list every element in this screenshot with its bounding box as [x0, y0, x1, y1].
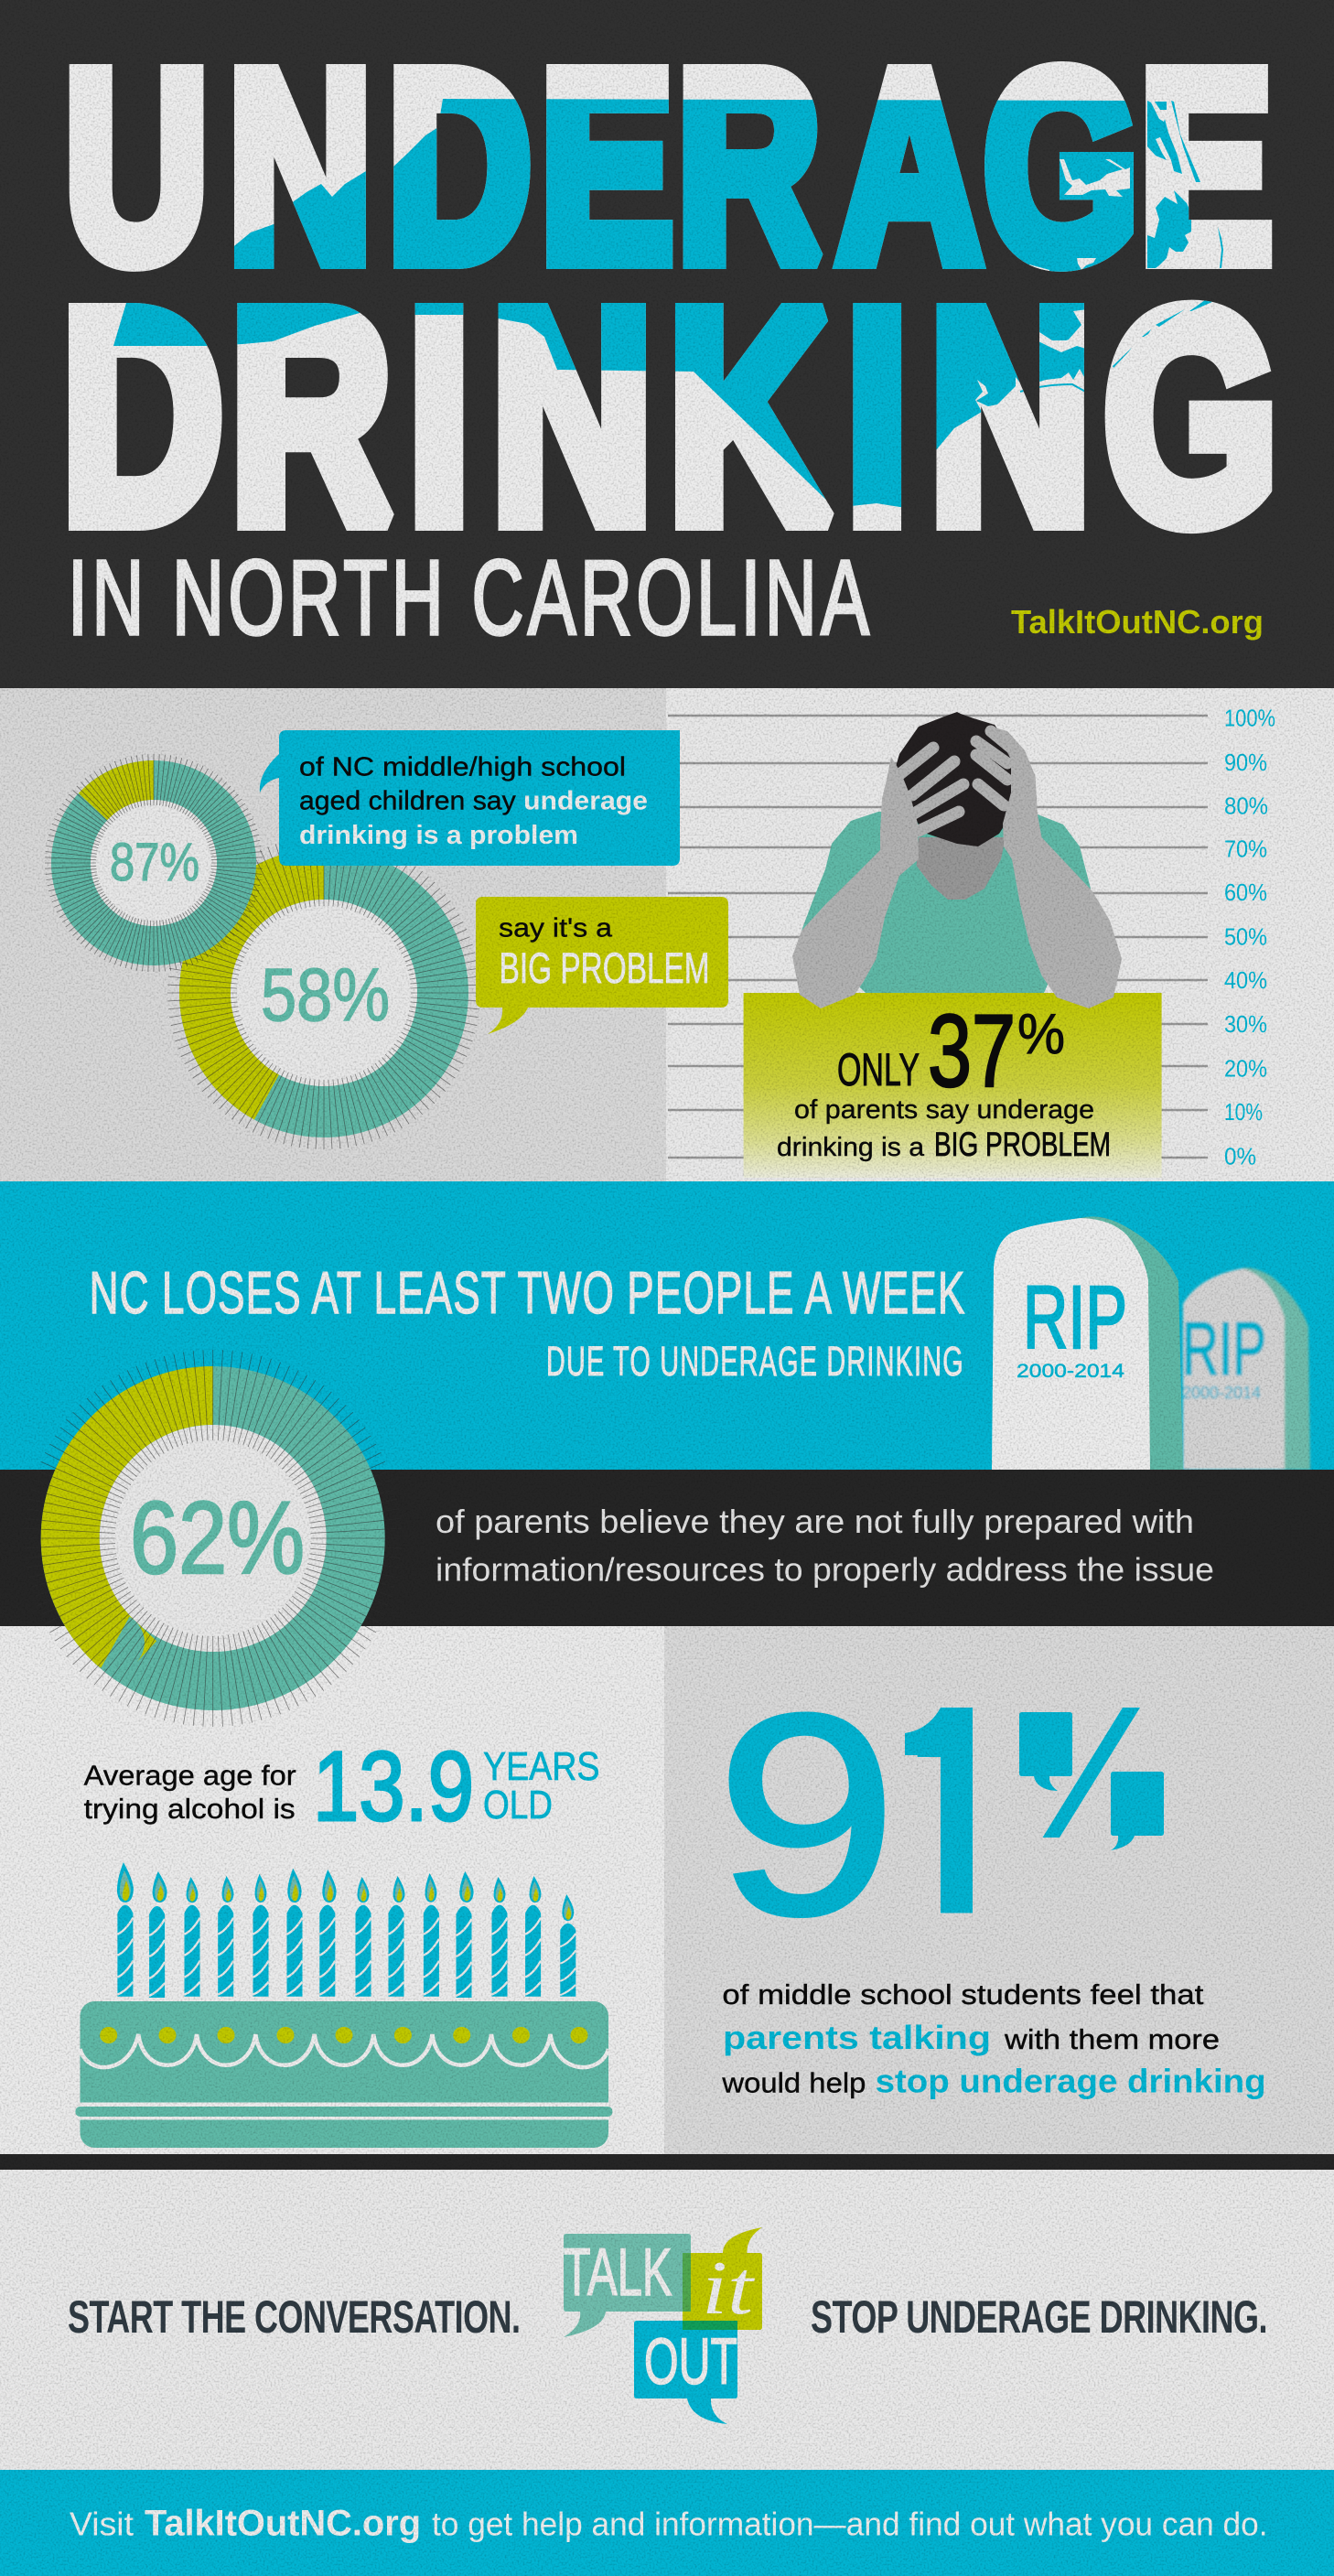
callout: children say problem: drinking is a problem	[299, 821, 578, 850]
percent scale labels: 0%	[1224, 1143, 1256, 1170]
average age text: 13.9	[313, 1730, 474, 1841]
footer text	[70, 2504, 1268, 2544]
percent scale labels: 80%	[1224, 792, 1268, 820]
big number: 91: 9	[715, 1654, 898, 1975]
middle school stat text	[721, 1978, 1266, 2100]
percent scale rule lines	[668, 716, 1208, 1158]
callout: children say problem: aged children say underage	[299, 787, 648, 816]
average age text: trying alcohol is	[84, 1793, 296, 1825]
preparedness text: information/resources to properly address the issue	[436, 1550, 1214, 1589]
logo: Talk It Out speech bubbles: OUT	[644, 2326, 737, 2398]
deaths subheading: DUE TO UNDERAGE DRINKING	[546, 1340, 963, 1385]
donut chart: 58 percent	[162, 831, 486, 1155]
footer text: to get help and information—and find out what you can do.	[432, 2506, 1268, 2543]
title: UNDERAGE DRINKING with North Carolina map fill: DRINKING	[61, 250, 1278, 585]
logo: Talk It Out speech bubbles: TALK	[564, 2236, 672, 2310]
big number: 91: 1	[892, 1658, 1052, 1970]
donut chart: 87 percent	[37, 746, 271, 980]
subtitle: IN NORTH CAROLINA	[68, 539, 869, 658]
middle school stat text: would help	[721, 2067, 866, 2099]
deaths headline: NC LOSES AT LEAST TWO PEOPLE A WEEK	[90, 1260, 964, 1326]
percent scale labels: 50%	[1224, 923, 1267, 951]
middle school stat text: of middle school students feel that	[722, 1978, 1204, 2010]
donut chart: 58 percent: 58%	[261, 954, 390, 1037]
parents stat text	[777, 994, 1111, 1163]
icon: front tombstone: RIP	[1023, 1267, 1127, 1367]
donut chart: 62 percent	[11, 1336, 414, 1741]
percent scale labels: 70%	[1224, 835, 1267, 863]
percent scale labels: 10%	[1224, 1098, 1263, 1126]
panel: parents preparedness band	[0, 1470, 1334, 1626]
percent scale labels: 30%	[1224, 1010, 1267, 1038]
percent scale labels: 100%	[1224, 705, 1275, 732]
parents stat text: %	[1017, 1003, 1065, 1066]
parents stat text: BIG PROBLEM	[934, 1126, 1111, 1163]
big number: 91	[728, 1708, 973, 1918]
parents stat text: drinking is a	[777, 1133, 925, 1162]
donut chart: 62 percent: 62%	[130, 1481, 305, 1595]
percent scale labels: 20%	[1224, 1054, 1267, 1082]
callout: big problem: BIG PROBLEM	[500, 943, 710, 992]
parents stat text: ONLY	[837, 1044, 920, 1095]
icon: front tombstone	[992, 1216, 1183, 1470]
illustration: birthday candles	[117, 1862, 576, 1998]
percent scale labels: 90%	[1224, 749, 1267, 776]
illustration: worried parent, hands on head	[744, 712, 1162, 1178]
middle school stat text: with them more	[1004, 2023, 1220, 2055]
call to action left: START THE CONVERSATION.	[68, 2292, 521, 2343]
panel: call to action background	[0, 2170, 1334, 2470]
title: UNDERAGE DRINKING with North Carolina map fill	[68, 61, 1272, 534]
footer text: TalkItOutNC.org	[145, 2504, 421, 2544]
panel: lower section background	[0, 1626, 1334, 2154]
divider band	[0, 2154, 1334, 2170]
preparedness text	[436, 1503, 1214, 1589]
callout: big problem	[476, 897, 728, 1034]
title: UNDERAGE DRINKING with North Carolina map fill: UNDERAGE	[64, 15, 1273, 317]
average age text: YEARS	[483, 1744, 600, 1789]
panel: perception gap background	[0, 688, 1334, 1181]
donut chart: 87 percent: 87%	[110, 833, 199, 892]
website link in header: TalkItOutNC.org	[1011, 603, 1264, 641]
illustration: cake	[75, 2001, 612, 2148]
preparedness text: of parents believe they are not fully prepared with	[436, 1503, 1194, 1540]
middle school stat text: parents talking	[723, 2019, 991, 2056]
parents stat text: of parents say underage	[794, 1095, 1094, 1125]
middle school stat text: stop underage drinking	[876, 2063, 1266, 2100]
percent scale labels: 60%	[1224, 878, 1267, 906]
callout: big problem: say it's a	[499, 914, 613, 943]
panel: deaths band background	[0, 1181, 1334, 1470]
callout: children say problem	[260, 730, 680, 866]
logo: Talk It Out speech bubbles	[564, 2227, 762, 2424]
call to action right: STOP UNDERAGE DRINKING.	[811, 2292, 1268, 2343]
average age text: OLD	[483, 1783, 553, 1827]
percent scale labels	[1224, 705, 1275, 1170]
icon: rear tombstone	[1182, 1267, 1310, 1470]
icon: rear tombstone: RIP	[1182, 1308, 1266, 1391]
logo: Talk It Out speech bubbles: it	[702, 2246, 756, 2331]
average age text	[84, 1730, 599, 1841]
panel: header background	[0, 0, 1334, 688]
parents stat text: 37	[928, 994, 1016, 1108]
icon: front tombstone: 2000-2014	[1017, 1361, 1124, 1382]
icon: percent sign built from speech bubbles	[1019, 1708, 1164, 1850]
footer text: Visit	[70, 2506, 134, 2543]
panel: footer band	[0, 2470, 1334, 2576]
average age text: Average age for	[84, 1760, 296, 1792]
percent scale labels: 40%	[1224, 966, 1267, 994]
icon: rear tombstone: 2000-2014	[1182, 1384, 1261, 1402]
callout: children say problem: of NC middle/high school	[299, 752, 626, 781]
